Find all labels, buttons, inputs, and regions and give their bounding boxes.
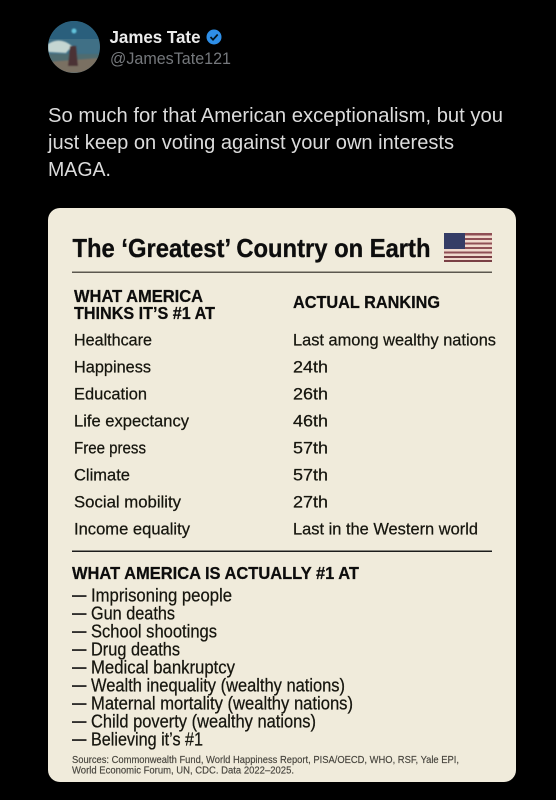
list: actual number one rankings bbox=[72, 584, 353, 750]
table: claimed versus actual rankings: 46th bbox=[293, 412, 328, 430]
table headers: WHAT AMERICA bbox=[74, 286, 203, 306]
table: claimed versus actual rankings: Social mobility bbox=[74, 492, 181, 512]
tweet text: MAGA. bbox=[48, 158, 111, 181]
table: claimed versus actual rankings: Life expectancy bbox=[74, 412, 189, 430]
table headers bbox=[74, 286, 440, 323]
sources note: World Economic Forum, UN, CDC. Data 2022–2025. bbox=[72, 764, 294, 776]
sources note bbox=[72, 754, 459, 776]
table: claimed versus actual rankings: 57th bbox=[293, 466, 328, 484]
list: actual number one rankings: Drug deaths bbox=[91, 638, 180, 660]
table: claimed versus actual rankings: Last in the Western world bbox=[293, 520, 478, 538]
list: actual number one rankings: Maternal mortality (wealthy nations) bbox=[91, 692, 353, 714]
tweet header bbox=[48, 21, 231, 73]
table: claimed versus actual rankings: Healthcare bbox=[74, 330, 152, 350]
table: claimed versus actual rankings: Free press bbox=[74, 438, 146, 458]
author handle: @JamesTate121 bbox=[110, 50, 231, 68]
table: claimed versus actual rankings: 27th bbox=[293, 492, 328, 512]
author name: James Tate bbox=[110, 27, 201, 47]
table: claimed versus actual rankings: Education bbox=[74, 384, 147, 404]
list: actual number one rankings: Wealth inequality (wealthy nations) bbox=[91, 674, 345, 696]
panel: infographic card bbox=[48, 208, 516, 782]
sources note: Sources: Commonwealth Fund, World Happiness Report, PISA/OECD, WHO, RSF, Yale EPI, bbox=[72, 754, 459, 766]
list: actual number one rankings: Imprisoning people bbox=[91, 584, 232, 606]
list: actual number one rankings: Child poverty (wealthy nations) bbox=[91, 710, 316, 732]
table: claimed versus actual rankings: 57th bbox=[293, 438, 328, 458]
table headers: THINKS IT’S #1 AT bbox=[74, 303, 215, 323]
tweet text bbox=[47, 104, 503, 181]
table: claimed versus actual rankings: Happiness bbox=[74, 358, 151, 376]
title: The ‘Greatest’ Country on Earth bbox=[72, 233, 430, 263]
list: actual number one rankings: School shootings bbox=[91, 620, 217, 642]
table: claimed versus actual rankings: Climate bbox=[74, 466, 130, 484]
icon: avatar bbox=[48, 21, 100, 73]
table: claimed versus actual rankings bbox=[74, 330, 496, 538]
table: claimed versus actual rankings: Income equality bbox=[74, 520, 190, 538]
list: actual number one rankings: Believing it’s #1 bbox=[91, 728, 203, 750]
table: claimed versus actual rankings: Last among wealthy nations bbox=[293, 330, 496, 350]
table: claimed versus actual rankings: 24th bbox=[293, 358, 328, 376]
table: claimed versus actual rankings: 26th bbox=[293, 384, 328, 404]
section heading: WHAT AMERICA IS ACTUALLY #1 AT bbox=[72, 563, 359, 583]
tweet text: So much for that American exceptionalism, but you bbox=[48, 104, 503, 127]
icon: verified badge bbox=[206, 30, 222, 44]
table headers: ACTUAL RANKING bbox=[293, 292, 440, 312]
list: actual number one rankings: Medical bankruptcy bbox=[91, 656, 236, 678]
icon: US flag bbox=[444, 233, 492, 262]
list: actual number one rankings: Gun deaths bbox=[91, 602, 175, 624]
tweet text: just keep on voting against your own interests bbox=[47, 131, 454, 154]
